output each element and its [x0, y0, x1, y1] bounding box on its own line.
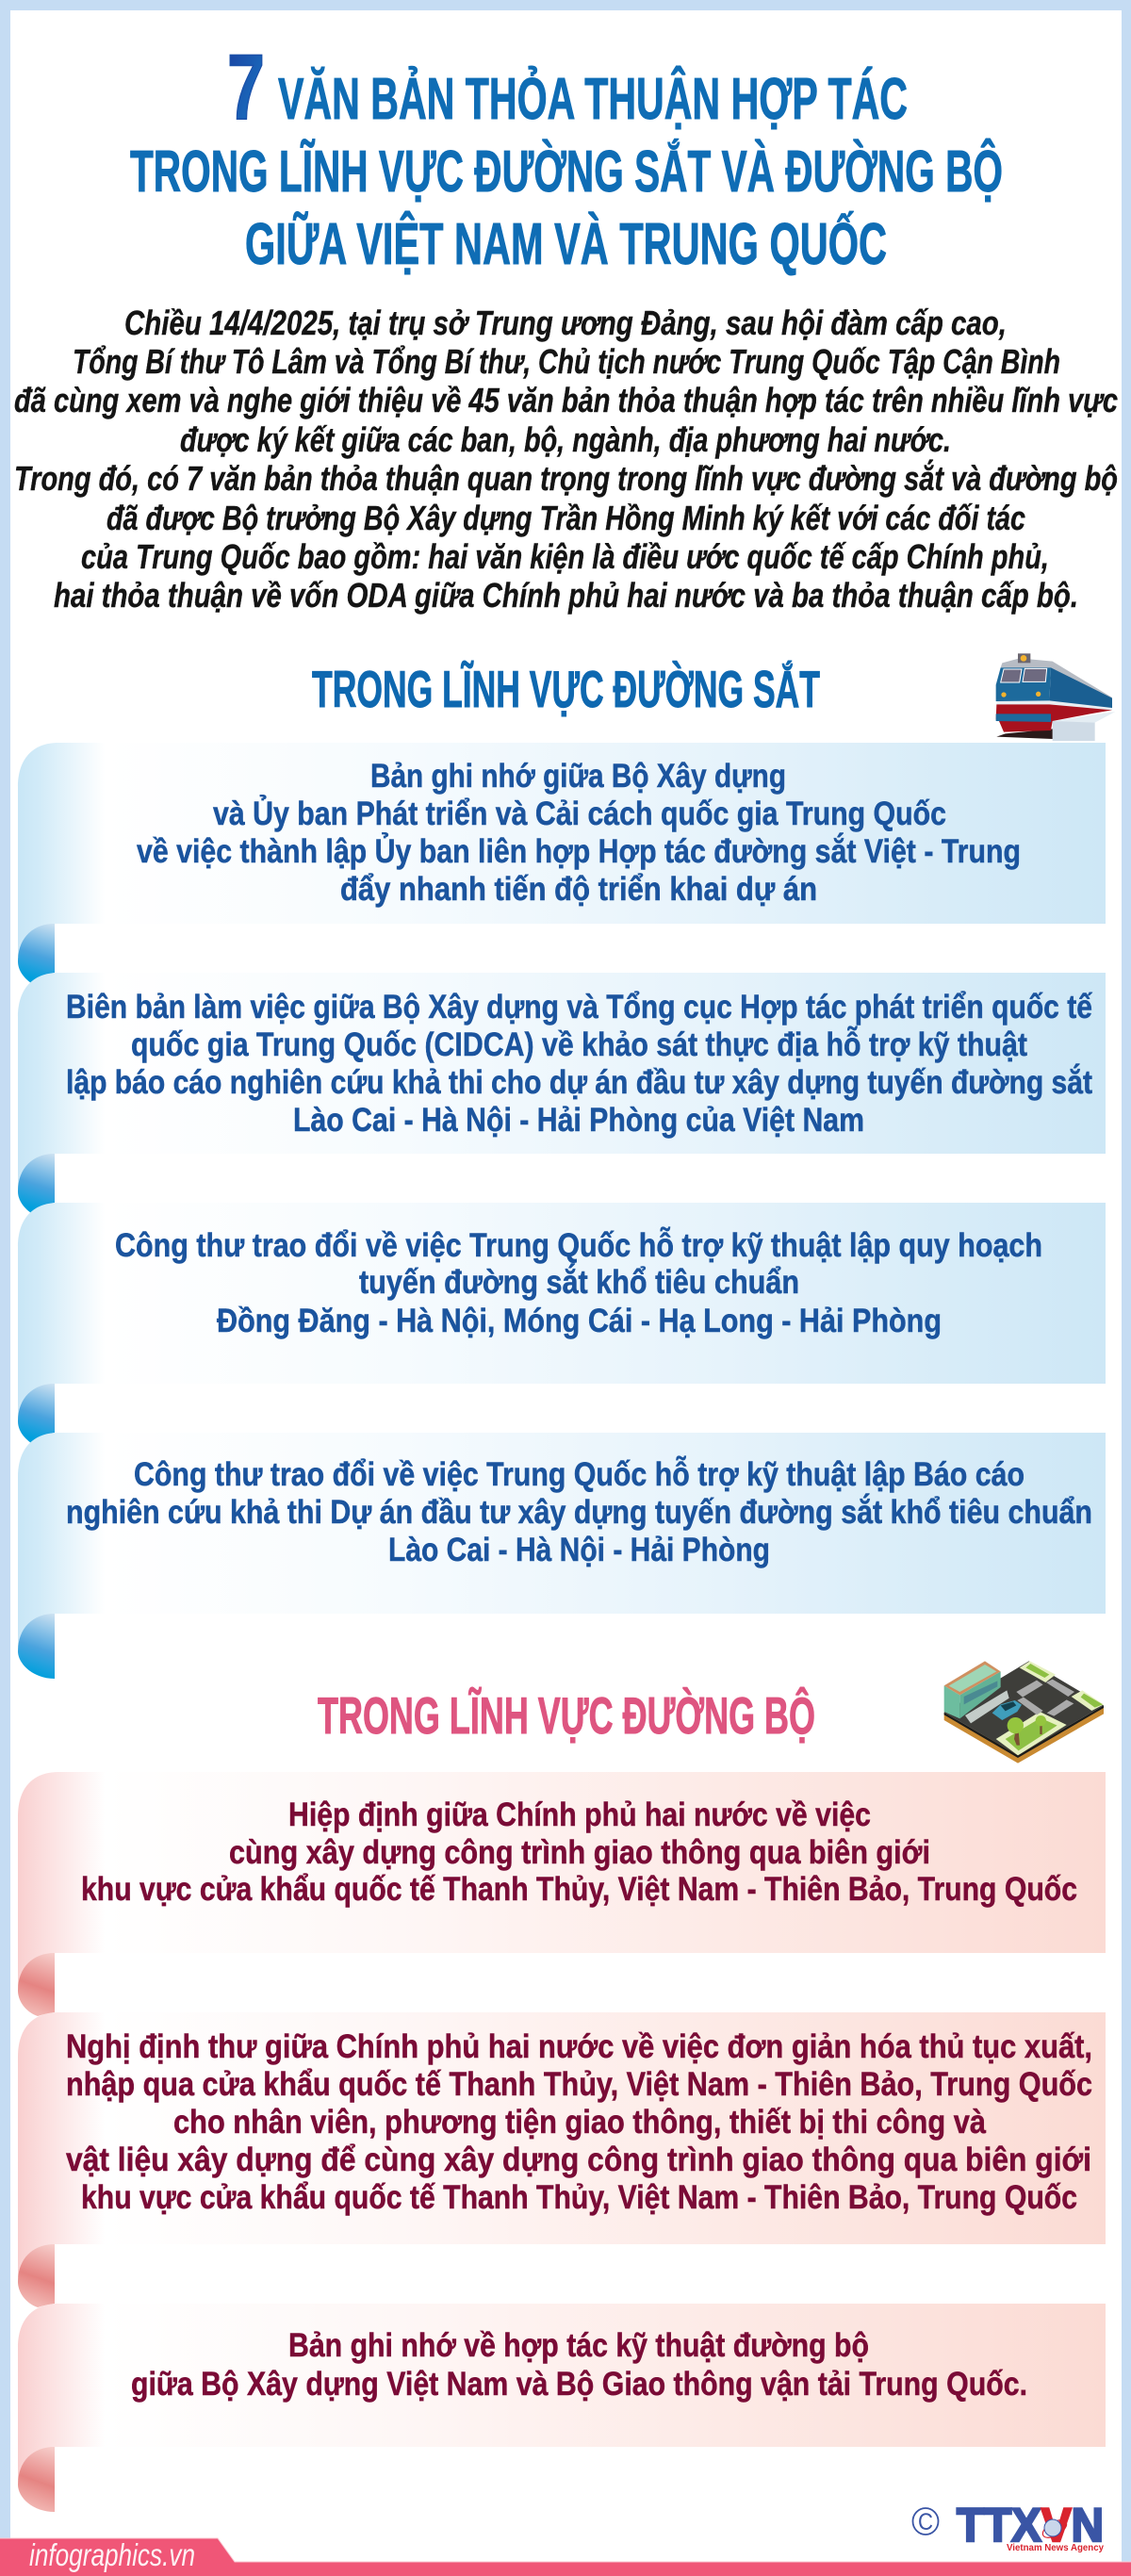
text: Hiệp định giữa Chính phủ hai nước về việc [288, 1797, 871, 1833]
logo: TTXVN: Vietnam News Agency [1007, 2543, 1104, 2553]
text: Lào Cai - Hà Nội - Hải Phòng [388, 1532, 770, 1568]
panel: railway 4 [18, 1433, 1106, 1679]
heading: railway: TRONG LĨNH VỰC ĐƯỜNG SẮT [312, 660, 820, 718]
ribbon tab [18, 1953, 55, 2016]
text [66, 989, 1092, 1139]
text [115, 1226, 1042, 1339]
logo: TTXVN: TTXVN [957, 2499, 1104, 2551]
panel: road 3 [18, 2304, 1106, 2512]
intro text [14, 304, 1118, 615]
text: đẩy nhanh tiến độ triển khai dự án [340, 871, 817, 908]
ribbon tab [18, 1384, 55, 1443]
text [66, 1455, 1092, 1568]
text [137, 758, 1021, 908]
text [66, 2028, 1092, 2216]
text: cùng xây dựng công trình giao thông qua biên giới [229, 1834, 930, 1871]
text: cho nhân viên, phương tiện giao thông, thiết bị thi công và [173, 2104, 986, 2141]
copyright symbol: C [918, 2509, 933, 2535]
heading: road: TRONG LĨNH VỰC ĐƯỜNG BỘ [318, 1686, 815, 1745]
text: Đồng Đăng - Hà Nội, Móng Cái - Hạ Long - Hải Phòng [217, 1303, 942, 1339]
icon: road intersection [944, 1661, 1104, 1764]
ribbon tab [18, 1614, 55, 1679]
icon: train [996, 653, 1115, 741]
footer text: infographics.vn [29, 2537, 195, 2572]
text: Công thư trao đổi về việc Trung Quốc hỗ trợ kỹ thuật lập Báo cáo [134, 1455, 1024, 1493]
text [131, 2327, 1027, 2403]
ribbon tab [18, 1154, 55, 1213]
footer bar [0, 2537, 1131, 2576]
text: tuyến đường sắt khổ tiêu chuẩn [359, 1263, 799, 1301]
panel: road 1 [18, 1772, 1106, 2016]
ribbon tab [18, 2447, 55, 2512]
copyright symbol [912, 2508, 939, 2535]
text [81, 1797, 1077, 1908]
text: về việc thành lập Ủy ban liên hợp Hợp tác đường sắt Việt - Trung [137, 832, 1021, 870]
title: 7 [227, 35, 265, 139]
panel: road 2 [18, 2012, 1106, 2307]
intro text: được ký kết giữa các ban, bộ, ngành, địa phương hai nước. [180, 420, 951, 459]
panel: railway 1 [18, 743, 1106, 983]
panel: railway 2 [18, 973, 1106, 1213]
title [130, 35, 1003, 277]
text: Bản ghi nhớ giữa Bộ Xây dựng [370, 758, 786, 795]
text: Bản ghi nhớ về hợp tác kỹ thuật đường bộ [288, 2327, 869, 2364]
panel: railway 3 [18, 1203, 1106, 1443]
ribbon tab [18, 2244, 55, 2307]
text: và Ủy ban Phát triển và Cải cách quốc gia Trung Quốc [213, 795, 946, 832]
ribbon tab [18, 924, 55, 983]
text: Lào Cai - Hà Nội - Hải Phòng của Việt Nam [293, 1102, 864, 1139]
